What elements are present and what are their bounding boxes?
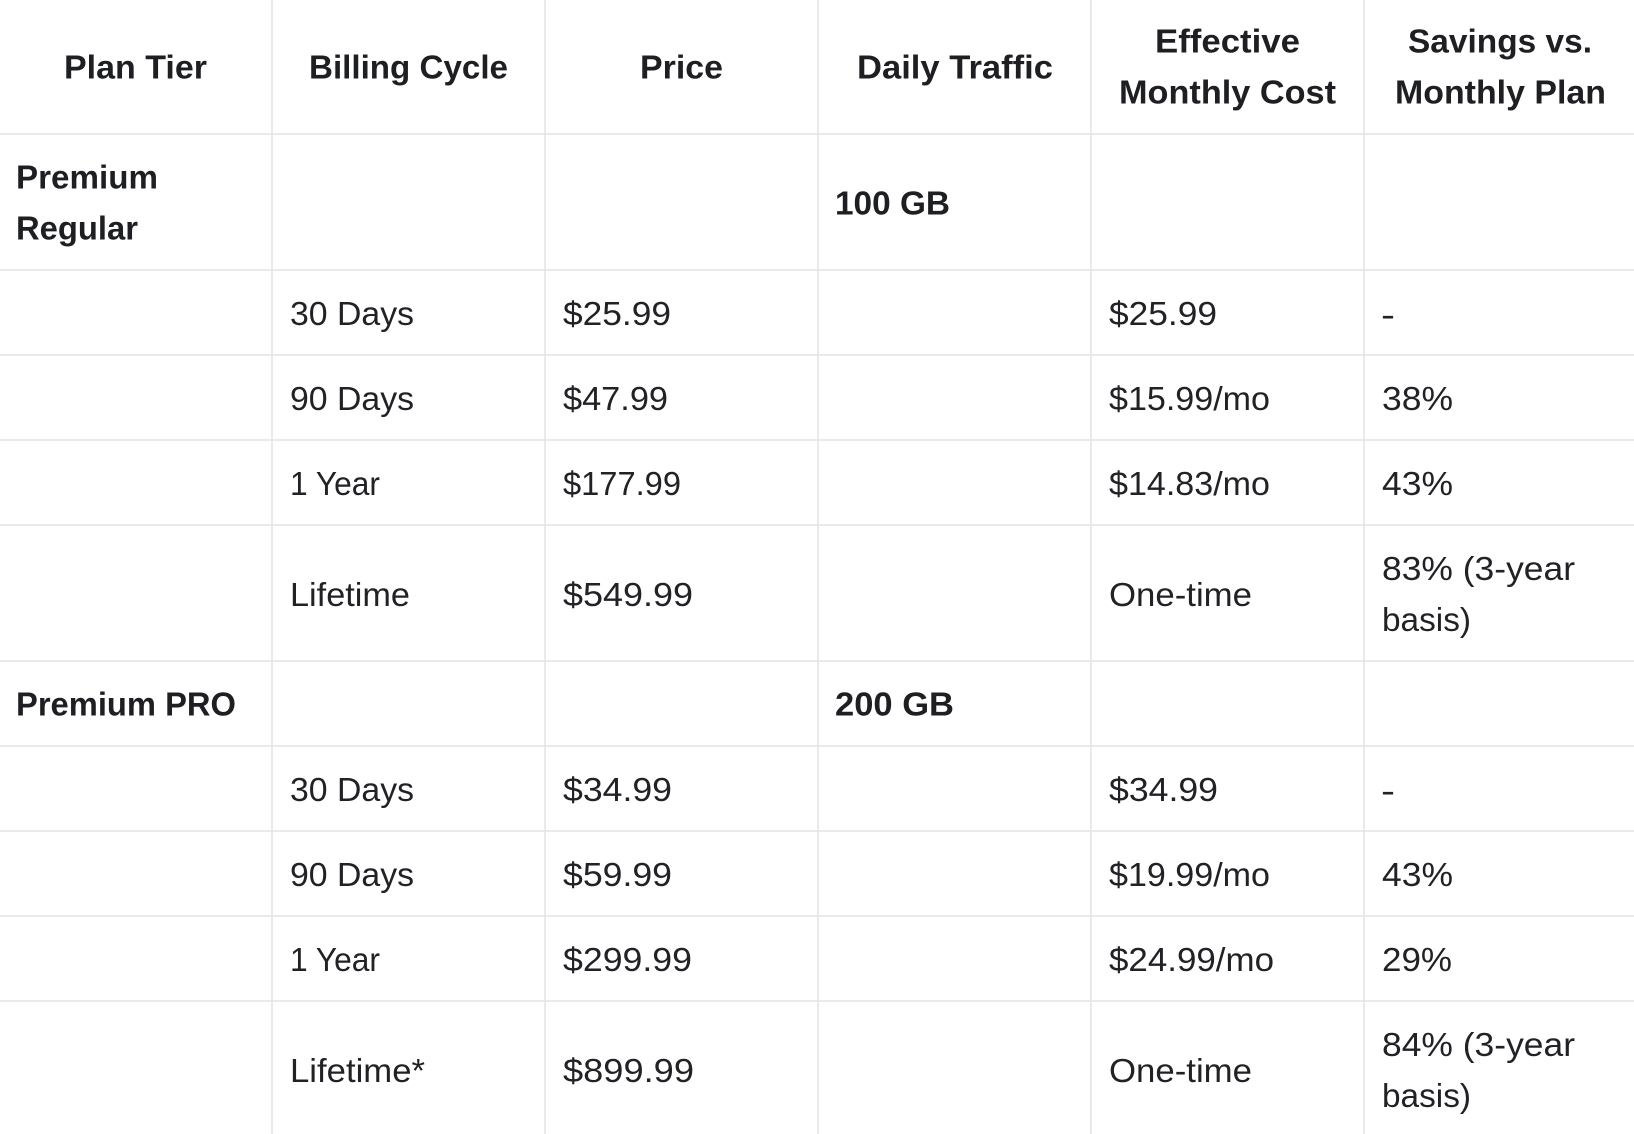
row: Regular 30 Days: $25.99 (563, 295, 671, 332)
savings note: basis) (1382, 1077, 1471, 1114)
heading: Effective Monthly Cost: Effective (1155, 22, 1300, 60)
row: PRO 1 Year: $24.99/mo (1109, 941, 1274, 978)
row: PRO Lifetime: One-time (1109, 1052, 1252, 1089)
heading: Savings vs. Monthly Plan (1395, 22, 1606, 110)
row: PRO 90 Days: 90 Days (290, 856, 414, 893)
row: PRO 30 Days: $34.99 (1109, 771, 1218, 808)
heading: Savings vs. Monthly Plan: Savings vs. (1408, 22, 1592, 60)
heading: Daily Traffic: Daily Traffic (857, 48, 1053, 86)
row: PRO 90 Days (290, 856, 1453, 893)
row: PRO 1 Year: $299.99 (563, 941, 692, 978)
row: PRO 90 Days: $59.99 (563, 856, 672, 893)
savings note (1382, 1026, 1575, 1114)
row: Regular 1 Year: 43% (1382, 465, 1453, 502)
row: Regular Lifetime (290, 550, 1575, 638)
row: Regular 30 Days (290, 295, 1395, 333)
row: PRO 1 Year: 1 Year (290, 941, 380, 978)
row: Regular 1 Year: $14.83/mo (1109, 465, 1270, 502)
row: PRO Lifetime: Lifetime* (290, 1052, 425, 1089)
heading: Effective Monthly Cost: Monthly Cost (1119, 74, 1336, 110)
savings note: 84% (3-year (1382, 1026, 1575, 1063)
row: PRO 30 Days: - (1381, 772, 1395, 809)
row: Regular 90 Days: 38% (1382, 380, 1453, 417)
row: PRO Lifetime (290, 1026, 1575, 1114)
row: PRO 90 Days: $19.99/mo (1109, 856, 1270, 893)
row: PRO 30 Days: $34.99 (563, 771, 672, 808)
row: Regular 1 Year (290, 465, 1453, 502)
row: Regular 90 Days (290, 380, 1453, 417)
heading: Savings vs. Monthly Plan: Monthly Plan (1395, 74, 1606, 110)
daily traffic: 100 GB (835, 184, 950, 222)
row: Regular 90 Days: $47.99 (563, 380, 668, 417)
savings note: basis) (1382, 601, 1471, 638)
heading: Billing Cycle: Billing Cycle (309, 48, 508, 86)
row: Regular 90 Days: $15.99/mo (1109, 380, 1270, 417)
tier row: Premium Regular (16, 158, 950, 246)
row: PRO Lifetime: $899.99 (563, 1052, 694, 1089)
header row (64, 22, 1606, 110)
heading: Price: Price (640, 48, 723, 86)
row: PRO 30 Days (290, 771, 1395, 809)
row: Regular 30 Days: $25.99 (1109, 295, 1217, 332)
row: Regular Lifetime: Lifetime (290, 576, 410, 613)
savings note: 83% (3-year (1382, 550, 1575, 587)
tier name: Regular (16, 210, 138, 246)
row: Regular Lifetime: $549.99 (563, 576, 693, 613)
row: Regular 30 Days: 30 Days (290, 295, 414, 332)
heading: Effective Monthly Cost (1119, 22, 1336, 110)
tier row: Premium PRO (16, 686, 954, 722)
row: PRO 90 Days: 43% (1382, 856, 1453, 893)
row: Regular Lifetime: One-time (1109, 576, 1252, 613)
row: Regular 1 Year: $177.99 (563, 465, 681, 502)
row: PRO 30 Days: 30 Days (290, 771, 414, 808)
savings note (1382, 550, 1575, 638)
daily traffic: 200 GB (835, 686, 954, 722)
tier name: Premium PRO (16, 686, 236, 722)
heading: Plan Tier: Plan Tier (64, 48, 207, 86)
row: Regular 1 Year: 1 Year (290, 465, 380, 502)
row: PRO 1 Year (290, 941, 1452, 978)
row: Regular 30 Days: - (1381, 296, 1395, 333)
tier name: Premium (16, 158, 158, 196)
row: Regular 90 Days: 90 Days (290, 380, 414, 417)
tier name (16, 158, 158, 246)
row: PRO 1 Year: 29% (1382, 941, 1452, 978)
